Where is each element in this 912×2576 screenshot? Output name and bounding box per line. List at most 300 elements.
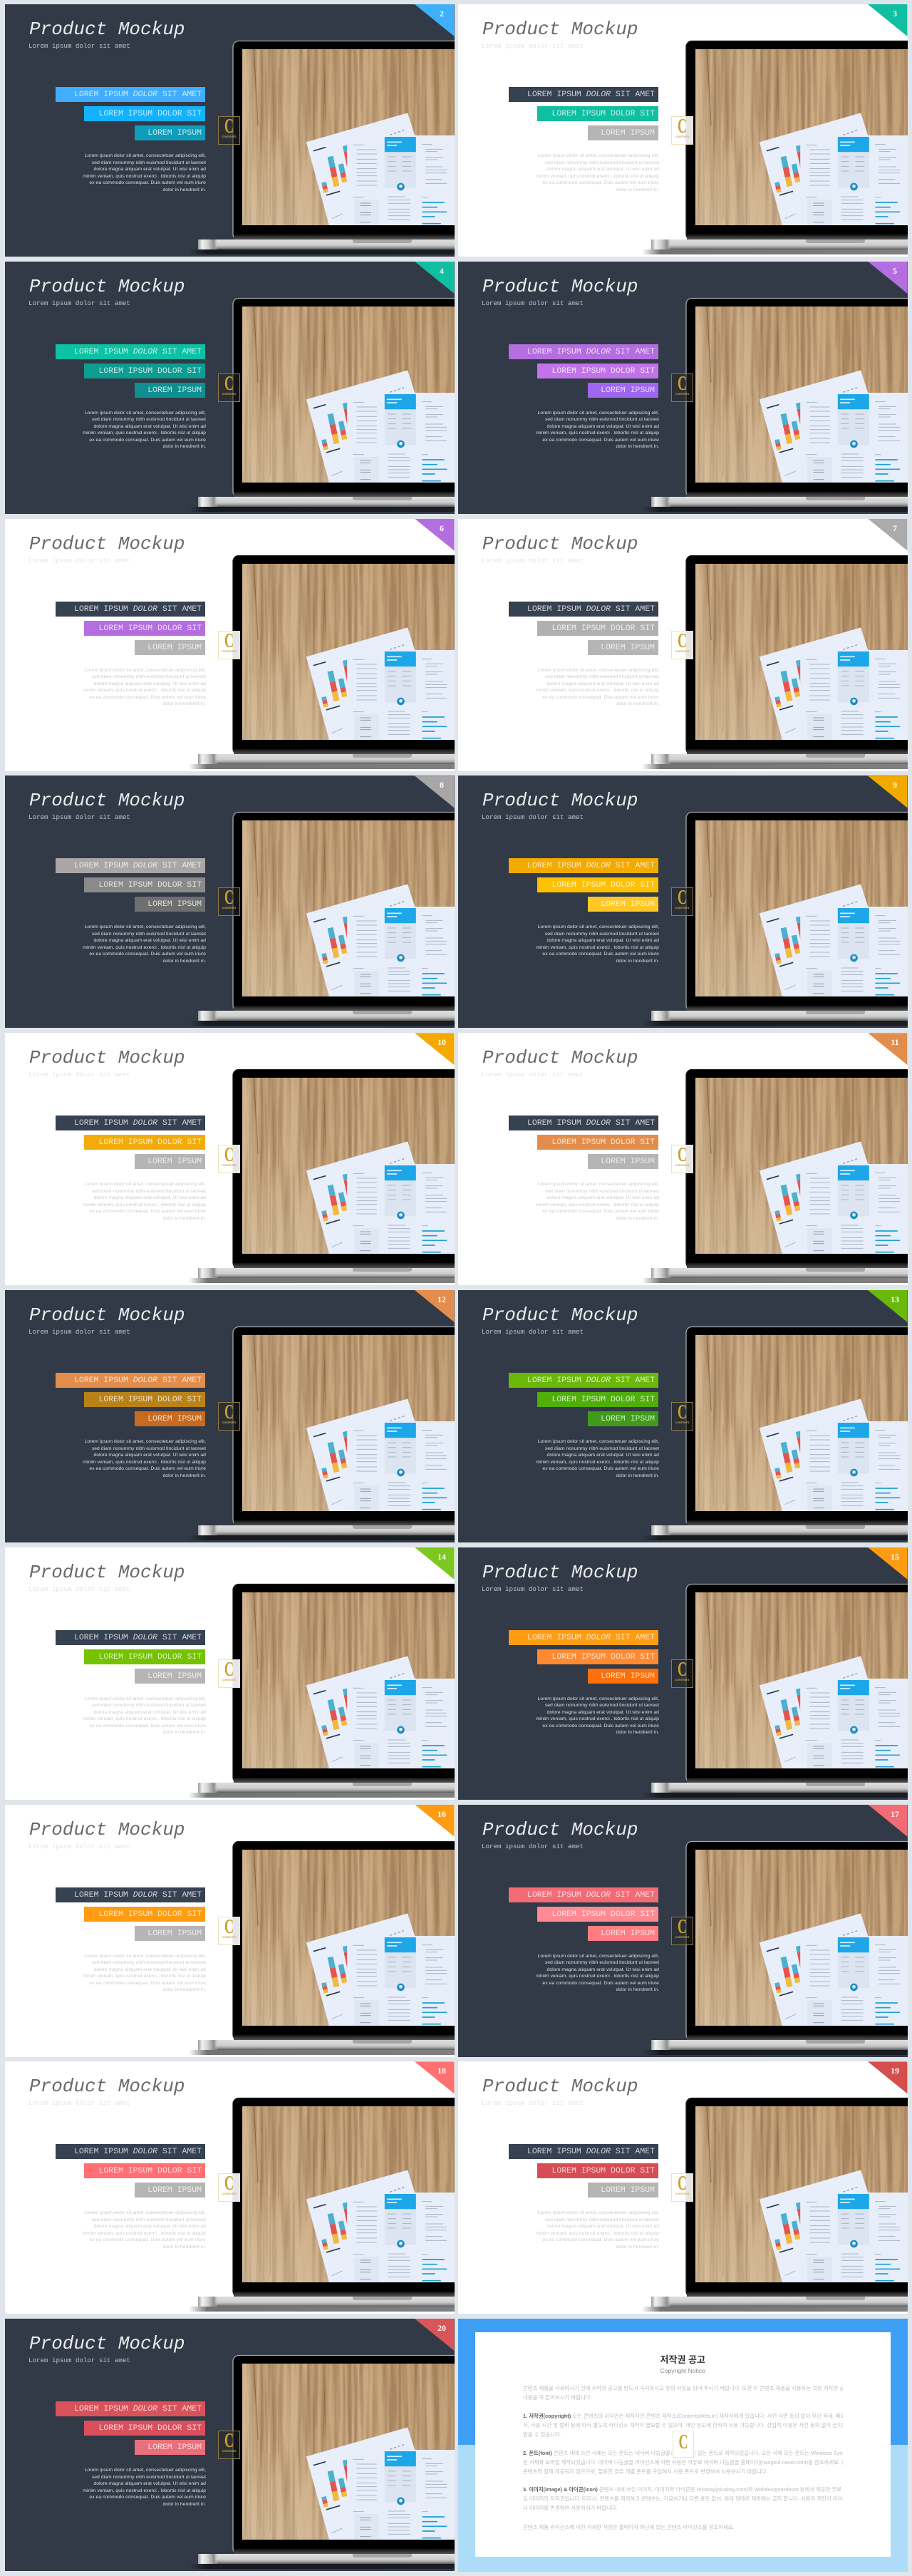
icon: logo badge: CONTENTS [675, 1421, 689, 1424]
title: Product Mockup [482, 533, 638, 555]
icon: logo badge: CONTENTS [675, 1679, 689, 1681]
corner tab [868, 262, 908, 294]
title: Product Mockup [29, 1047, 185, 1068]
body text: dolor in hendrerit in. [162, 444, 206, 449]
notice subtitle: Copyright Notice [660, 2367, 705, 2374]
label bars [56, 602, 205, 655]
icon: logo badge [218, 116, 240, 145]
label bars: LOREM IPSUM DOLOR SIT [98, 1395, 202, 1404]
body text [47, 1696, 206, 1736]
page number: 3 [893, 9, 897, 19]
body text: minim veniam, quis nostrud exerci . lobortis nisl ut aliquip [83, 2231, 206, 2236]
body text: dolore magna aliquam erat volutpat. Ut wisi enim ad [547, 1195, 659, 1200]
panel: slide 5 [457, 262, 908, 514]
label bars: LOREM IPSUM [601, 643, 655, 652]
icon: logo badge: CONTENTS [222, 907, 236, 910]
icon: logo badge [671, 116, 693, 145]
title: Product Mockup [29, 790, 185, 811]
body text: ex ea commodo consequat. Duis autem vel eum iriure [542, 952, 659, 957]
body text: dolore magna aliquam erat volutpat. Ut wisi enim ad [547, 938, 659, 943]
body text: Lorem ipsum dolor sit amet, consectetuer adipiscing elit, [538, 924, 659, 929]
icon: logo badge: CONTENTS [675, 2193, 689, 2195]
body text: Lorem ipsum dolor sit amet, consectetuer adipiscing elit, [538, 668, 659, 673]
page number: 20 [437, 2323, 446, 2333]
title: Product Mockup [482, 1562, 638, 1583]
body text: dolore magna aliquam erat volutpat. Ut wisi enim ad [94, 681, 206, 686]
body text [47, 2210, 206, 2250]
body text: minim veniam, quis nostrud exerci . lobortis nisl ut aliquip [536, 174, 659, 178]
laptop mockup [4, 2319, 455, 2571]
body text [536, 411, 659, 449]
body text: minim veniam, quis nostrud exerci . lobortis nisl ut aliquip [536, 945, 659, 950]
page number: 4 [440, 266, 444, 276]
body text: Lorem ipsum dolor sit amet, consectetuer adipiscing elit, [538, 1182, 659, 1187]
label bars: LOREM IPSUM DOLOR SIT AMET [527, 347, 655, 356]
subtitle: Lorem ipsum dolor sit amet [28, 1328, 130, 1336]
label bars: LOREM IPSUM DOLOR SIT AMET [74, 861, 202, 870]
label bars: LOREM IPSUM DOLOR SIT AMET [527, 604, 655, 614]
body text: dolor in hendrerit in. [616, 701, 659, 706]
body text: minim veniam, quis nostrud exerci . lobortis nisl ut aliquip [536, 688, 659, 693]
body text: ex ea commodo consequat. Duis autem vel eum iriure [89, 1724, 206, 1729]
body text [83, 153, 206, 192]
laptop mockup [457, 2061, 908, 2314]
body text: dolor in hendrerit in. [162, 1216, 206, 1221]
body text: sed diam nonummy nibh euismod tincidunt ut laoreet [92, 1703, 206, 1708]
body text: sed diam nonummy nibh euismod tincidunt ut laoreet [92, 1960, 206, 1965]
subtitle: Lorem ipsum dolor sit amet [28, 813, 130, 821]
label bars: LOREM IPSUM DOLOR SIT [98, 2166, 202, 2175]
label bars: LOREM IPSUM DOLOR SIT AMET [74, 2404, 202, 2413]
body text: minim veniam, quis nostrud exerci . lobortis nisl ut aliquip [536, 2231, 659, 2236]
panel: slide 16 [4, 1805, 455, 2057]
body text: dolore magna aliquam erat volutpat. Ut wisi enim ad [94, 167, 206, 172]
title: Product Mockup [29, 2333, 185, 2354]
body text: ex ea commodo consequat. Duis autem vel eum iriure [89, 2495, 206, 2500]
label bars: LOREM IPSUM DOLOR SIT [551, 624, 655, 633]
body text [536, 668, 659, 706]
body text: Lorem ipsum dolor sit amet, consectetuer adipiscing elit, [85, 924, 206, 929]
label bars [509, 602, 658, 655]
body text: dolor in hendrerit in. [162, 2245, 206, 2250]
body text: sed diam nonummy nibh euismod tincidunt ut laoreet [545, 1446, 659, 1451]
notice card [475, 2332, 891, 2557]
label bars: LOREM IPSUM [147, 386, 202, 395]
page number: 6 [440, 523, 444, 533]
body text: sed diam nonummy nibh euismod tincidunt ut laoreet [92, 674, 206, 679]
body text: sed diam nonummy nibh euismod tincidunt ut laoreet [92, 2475, 206, 2479]
notice clause 2 line 3: 콘텐츠와 함께 제공되지 않으므로, 필요한 경우 개별 폰트를 구입해서 사용 폰트로 변경하여 사용하시기 바랍니다. [523, 2468, 768, 2475]
icon: logo badge: CONTENTS [222, 393, 236, 396]
body text: dolor in hendrerit in. [616, 1216, 659, 1221]
body text: ex ea commodo consequat. Duis autem vel eum iriure [89, 1981, 206, 1986]
body text: dolor in hendrerit in. [616, 1987, 659, 1992]
icon: logo badge [671, 1402, 693, 1431]
body text: Lorem ipsum dolor sit amet, consectetuer adipiscing elit, [85, 411, 206, 416]
label bars: LOREM IPSUM DOLOR SIT [551, 1652, 655, 1661]
panel: slide 19 [457, 2061, 908, 2314]
icon: logo badge: CONTENTS [675, 135, 689, 138]
laptop mockup [192, 40, 455, 254]
label bars: LOREM IPSUM [601, 128, 655, 138]
panel: slide 8 [4, 776, 455, 1028]
body text [47, 1181, 206, 1222]
label bars: LOREM IPSUM [601, 900, 655, 909]
body text: sed diam nonummy nibh euismod tincidunt ut laoreet [92, 417, 206, 422]
title: Product Mockup [29, 2076, 185, 2097]
title: Product Mockup [29, 1819, 185, 1840]
icon: logo badge [218, 887, 240, 916]
body text: sed diam nonummy nibh euismod tincidunt ut laoreet [545, 160, 659, 165]
icon: logo badge: CONTENTS [222, 135, 236, 138]
corner tab [868, 1033, 908, 1065]
body text: ex ea commodo consequat. Duis autem vel eum iriure [89, 1466, 206, 1471]
page number: 16 [437, 1809, 446, 1819]
label bars: LOREM IPSUM DOLOR SIT [551, 366, 655, 376]
laptop mockup [643, 555, 908, 769]
subtitle: Lorem ipsum dolor sit amet [482, 557, 584, 565]
body text: minim veniam, quis nostrud exerci . lobortis nisl ut aliquip [83, 431, 206, 436]
title: Product Mockup [29, 533, 185, 555]
body text: sed diam nonummy nibh euismod tincidunt ut laoreet [92, 2217, 206, 2222]
notice intro line 2: 내용을 꼭 읽어보시기 바랍니다. [523, 2394, 592, 2401]
icon: logo badge [671, 373, 693, 402]
body text: minim veniam, quis nostrud exerci . lobortis nisl ut aliquip [83, 1460, 206, 1464]
label bars: LOREM IPSUM DOLOR SIT AMET [527, 861, 655, 870]
body text: Lorem ipsum dolor sit amet, consectetuer adipiscing elit, [85, 1954, 206, 1959]
label bars: LOREM IPSUM DOLOR SIT [98, 109, 202, 118]
page number: 17 [891, 1809, 899, 1819]
label bars [509, 1373, 658, 1426]
body text: minim veniam, quis nostrud exerci . lobortis nisl ut aliquip [83, 688, 206, 693]
body text: dolore magna aliquam erat volutpat. Ut wisi enim ad [547, 167, 659, 172]
icon: logo badge: C [678, 2431, 688, 2453]
icon: logo badge [671, 1145, 693, 1173]
body text: ex ea commodo consequat. Duis autem vel eum iriure [542, 1466, 659, 1471]
body text: dolore magna aliquam erat volutpat. Ut wisi enim ad [94, 1195, 206, 1200]
title: Product Mockup [29, 19, 185, 40]
body text: minim veniam, quis nostrud exerci . lobortis nisl ut aliquip [83, 945, 206, 950]
body text: dolore magna aliquam erat volutpat. Ut wisi enim ad [547, 1967, 659, 1972]
body text [500, 1438, 659, 1479]
label bars: LOREM IPSUM [147, 1671, 202, 1681]
body text: dolor in hendrerit in. [162, 959, 206, 964]
body text: ex ea commodo consequat. Duis autem vel eum iriure [89, 1209, 206, 1214]
label bars: LOREM IPSUM DOLOR SIT [551, 1395, 655, 1404]
page number: 5 [893, 266, 897, 276]
body text: ex ea commodo consequat. Duis autem vel eum iriure [542, 695, 659, 700]
label bars: LOREM IPSUM DOLOR SIT AMET [74, 1376, 202, 1385]
label bars: LOREM IPSUM DOLOR SIT [98, 366, 202, 376]
title: Product Mockup [482, 2076, 638, 2097]
label bars: LOREM IPSUM [147, 643, 202, 652]
laptop mockup [4, 1290, 455, 1542]
body text: dolore magna aliquam erat volutpat. Ut wisi enim ad [547, 2224, 659, 2229]
panel: slide 11 [457, 1033, 908, 1285]
panel: slide 6 [4, 519, 455, 771]
icon: logo badge: CONTENTS [675, 393, 689, 396]
body text: dolore magna aliquam erat volutpat. Ut wisi enim ad [547, 681, 659, 686]
icon: logo badge: CONTENTS [675, 1936, 689, 1939]
icon: logo badge: CONTENTS [222, 2193, 236, 2195]
laptop mockup [190, 555, 455, 769]
corner tab [415, 776, 455, 808]
label bars: LOREM IPSUM [601, 1671, 655, 1681]
body text [47, 1953, 206, 1994]
body text: dolore magna aliquam erat volutpat. Ut wisi enim ad [94, 2224, 206, 2229]
body text: minim veniam, quis nostrud exerci . lobortis nisl ut aliquip [83, 174, 206, 178]
body text: dolore magna aliquam erat volutpat. Ut wisi enim ad [547, 1453, 659, 1458]
body text: dolor in hendrerit in. [162, 187, 206, 192]
page number: 9 [893, 780, 897, 790]
body text: ex ea commodo consequat. Duis autem vel eum iriure [89, 695, 206, 700]
laptop mockup [457, 1547, 908, 1800]
panel: slide 20 [4, 2319, 455, 2571]
label bars: LOREM IPSUM [147, 1157, 202, 1166]
body text: Lorem ipsum dolor sit amet, consectetuer adipiscing elit, [85, 1182, 206, 1187]
label bars: LOREM IPSUM DOLOR SIT [98, 624, 202, 633]
body text: Lorem ipsum dolor sit amet, consectetuer adipiscing elit, [85, 2468, 206, 2473]
body text: Lorem ipsum dolor sit amet, consectetuer adipiscing elit, [538, 2210, 659, 2215]
icon: logo badge [671, 2173, 693, 2202]
body text: dolore magna aliquam erat volutpat. Ut wisi enim ad [94, 1967, 206, 1972]
laptop mockup [4, 1547, 455, 1800]
body text: dolore magna aliquam erat volutpat. Ut wisi enim ad [547, 424, 659, 429]
body text: sed diam nonummy nibh euismod tincidunt ut laoreet [545, 674, 659, 679]
subtitle: Lorem ipsum dolor sit amet [482, 1328, 584, 1336]
laptop mockup [646, 298, 908, 512]
panel: slide 4 [4, 262, 455, 514]
corner tab [415, 1290, 455, 1322]
body text: dolor in hendrerit in. [616, 444, 659, 449]
icon: logo badge [218, 373, 240, 402]
laptop mockup [643, 40, 908, 254]
body text: Lorem ipsum dolor sit amet, consectetuer adipiscing elit, [538, 411, 659, 416]
laptop mockup [192, 298, 455, 512]
label bars [509, 858, 658, 912]
body text: sed diam nonummy nibh euismod tincidunt ut laoreet [92, 932, 206, 937]
label bars: LOREM IPSUM DOLOR SIT AMET [74, 604, 202, 614]
laptop mockup [4, 1805, 455, 2057]
body text: minim veniam, quis nostrud exerci . lobortis nisl ut aliquip [83, 1202, 206, 1207]
icon: logo badge [671, 1917, 693, 1945]
label bars [56, 858, 205, 912]
label bars: LOREM IPSUM DOLOR SIT AMET [527, 1633, 655, 1642]
corner tab [868, 1547, 908, 1580]
icon: logo badge [673, 2431, 694, 2458]
body text: ex ea commodo consequat. Duis autem vel eum iriure [89, 180, 206, 185]
label bars: LOREM IPSUM [147, 128, 202, 138]
body text: dolore magna aliquam erat volutpat. Ut wisi enim ad [94, 424, 206, 429]
label bars [56, 2144, 205, 2198]
label bars [56, 1116, 205, 1169]
title: Product Mockup [29, 1562, 185, 1583]
label bars [56, 2401, 205, 2455]
label bars: LOREM IPSUM [147, 900, 202, 909]
body text: sed diam nonummy nibh euismod tincidunt ut laoreet [92, 1446, 206, 1451]
panel: slide 18 [4, 2061, 455, 2314]
title: Product Mockup [29, 1304, 185, 1326]
body text: sed diam nonummy nibh euismod tincidunt ut laoreet [545, 932, 659, 937]
body text: minim veniam, quis nostrud exerci . lobortis nisl ut aliquip [83, 2488, 206, 2493]
subtitle: Lorem ipsum dolor sit amet [482, 1843, 584, 1850]
body text: sed diam nonummy nibh euismod tincidunt ut laoreet [545, 1960, 659, 1965]
title: Product Mockup [482, 1304, 638, 1326]
body text: sed diam nonummy nibh euismod tincidunt ut laoreet [545, 1189, 659, 1194]
body text: dolore magna aliquam erat volutpat. Ut wisi enim ad [94, 938, 206, 943]
icon: logo badge: CONTENTS [222, 1164, 236, 1167]
icon: logo badge: CONTENTS [222, 1421, 236, 1424]
body text: Lorem ipsum dolor sit amet, consectetuer adipiscing elit, [538, 1954, 659, 1959]
page number: 13 [891, 1294, 899, 1304]
panel: slide 15 [457, 1547, 908, 1800]
page number: 12 [437, 1294, 446, 1304]
body text: ex ea commodo consequat. Duis autem vel eum iriure [89, 2237, 206, 2242]
icon: logo badge [671, 631, 693, 659]
subtitle: Lorem ipsum dolor sit amet [28, 1585, 130, 1593]
label bars [509, 2144, 658, 2198]
icon: logo badge: CONTENTS [222, 650, 236, 653]
panel: slide 17 [457, 1805, 908, 2057]
body text: dolore magna aliquam erat volutpat. Ut wisi enim ad [94, 1710, 206, 1715]
label bars: LOREM IPSUM DOLOR SIT [551, 2166, 655, 2175]
panel: copyright notice [458, 2319, 908, 2572]
laptop mockup [457, 776, 908, 1028]
corner tab [415, 4, 455, 36]
icon: logo badge: CONTENTS [675, 650, 689, 653]
title: Product Mockup [29, 276, 185, 297]
body text: Lorem ipsum dolor sit amet, consectetuer adipiscing elit, [85, 1696, 206, 1701]
corner tab [868, 4, 908, 36]
page number: 15 [891, 1552, 899, 1562]
body text [536, 153, 659, 192]
label bars: LOREM IPSUM DOLOR SIT [98, 880, 202, 890]
subtitle: Lorem ipsum dolor sit amet [28, 1843, 130, 1850]
body text [47, 2467, 206, 2508]
label bars: LOREM IPSUM DOLOR SIT [98, 2423, 202, 2433]
corner tab [415, 1547, 455, 1580]
body text: Lorem ipsum dolor sit amet, consectetuer adipiscing elit, [85, 153, 206, 158]
panel: slide 13 [457, 1290, 908, 1542]
body text [83, 411, 206, 449]
body text: dolor in hendrerit in. [162, 701, 206, 706]
notice title: 저작권 공고 [660, 2354, 705, 2365]
subtitle: Lorem ipsum dolor sit amet [28, 1071, 130, 1078]
body text [83, 668, 206, 706]
label bars [509, 87, 658, 140]
body text: sed diam nonummy nibh euismod tincidunt ut laoreet [545, 2217, 659, 2222]
corner tab [415, 1033, 455, 1065]
label bars: LOREM IPSUM [147, 1414, 202, 1423]
label bars: LOREM IPSUM [601, 386, 655, 395]
label bars: LOREM IPSUM DOLOR SIT AMET [74, 2147, 202, 2156]
laptop mockup [4, 2061, 455, 2314]
body text: Lorem ipsum dolor sit amet, consectetuer adipiscing elit, [85, 1439, 206, 1444]
body text: sed diam nonummy nibh euismod tincidunt ut laoreet [545, 417, 659, 422]
subtitle: Lorem ipsum dolor sit amet [482, 42, 584, 50]
label bars [509, 344, 658, 398]
icon: logo badge: CONTENTS [222, 2450, 236, 2453]
body text: dolore magna aliquam erat volutpat. Ut wisi enim ad [547, 1710, 659, 1715]
corner tab [415, 1805, 455, 1837]
body text: Lorem ipsum dolor sit amet, consectetuer adipiscing elit, [538, 153, 659, 158]
label bars [509, 1116, 658, 1169]
body text: ex ea commodo consequat. Duis autem vel eum iriure [89, 438, 206, 443]
icon: logo badge: CONTENTS [222, 1936, 236, 1939]
title: Product Mockup [482, 790, 638, 811]
label bars: LOREM IPSUM DOLOR SIT AMET [527, 90, 655, 99]
icon: logo badge [671, 1659, 693, 1688]
label bars: LOREM IPSUM DOLOR SIT AMET [74, 1118, 202, 1128]
page number: 14 [437, 1552, 446, 1562]
icon: logo badge [218, 1917, 240, 1945]
body text: sed diam nonummy nibh euismod tincidunt ut laoreet [92, 1189, 206, 1194]
label bars [56, 1373, 205, 1426]
title: Product Mockup [482, 1047, 638, 1068]
body text: minim veniam, quis nostrud exerci . lobortis nisl ut aliquip [83, 1716, 206, 1721]
label bars: LOREM IPSUM DOLOR SIT [98, 1138, 202, 1147]
corner tab [415, 2319, 455, 2351]
label bars: LOREM IPSUM DOLOR SIT [98, 1910, 202, 1919]
icon: logo badge: CONTENTS [222, 1679, 236, 1681]
laptop mockup [457, 1290, 908, 1542]
page number: 19 [891, 2066, 899, 2076]
label bars [56, 344, 205, 398]
body text: ex ea commodo consequat. Duis autem vel eum iriure [542, 180, 659, 185]
subtitle: Lorem ipsum dolor sit amet [482, 1071, 584, 1078]
subtitle: Lorem ipsum dolor sit amet [482, 1585, 584, 1593]
label bars: LOREM IPSUM DOLOR SIT AMET [527, 1118, 655, 1128]
label bars [509, 1630, 658, 1684]
page number: 2 [440, 9, 444, 19]
body text: ex ea commodo consequat. Duis autem vel eum iriure [89, 952, 206, 957]
notice closing: 콘텐츠 제품 라이선스에 대한 자세한 사항은 홈페이지 하단에 있는 콘텐츠 라이선스를 참조하세요. [523, 2524, 735, 2530]
laptop mockup [457, 1805, 908, 2057]
label bars: LOREM IPSUM [601, 1414, 655, 1423]
icon: logo badge [218, 631, 240, 659]
panel: slide 10 [4, 1033, 455, 1285]
body text: minim veniam, quis nostrud exerci . lobortis nisl ut aliquip [536, 1460, 659, 1464]
label bars: LOREM IPSUM DOLOR SIT AMET [74, 1890, 202, 1900]
laptop mockup [4, 1033, 455, 1285]
label bars: LOREM IPSUM DOLOR SIT [98, 1652, 202, 1661]
page number: 18 [437, 2066, 446, 2076]
panel: slide 3 [457, 4, 908, 257]
icon: logo badge [218, 2431, 240, 2459]
subtitle: Lorem ipsum dolor sit amet [482, 813, 584, 821]
title: Product Mockup [482, 19, 638, 40]
body text: Lorem ipsum dolor sit amet, consectetuer adipiscing elit, [538, 1439, 659, 1444]
label bars [56, 87, 205, 140]
body text: sed diam nonummy nibh euismod tincidunt ut laoreet [92, 160, 206, 165]
title: Product Mockup [482, 1819, 638, 1840]
icon: logo badge [218, 1402, 240, 1431]
icon: logo badge [218, 1145, 240, 1173]
panel: slide 9 [457, 776, 908, 1028]
body text: ex ea commodo consequat. Duis autem vel eum iriure [542, 1981, 659, 1986]
body text: dolore magna aliquam erat volutpat. Ut wisi enim ad [94, 2481, 206, 2486]
label bars [56, 1630, 205, 1684]
notice clause 1 line 3: 받을 수 있습니다. [523, 2431, 561, 2438]
label bars: LOREM IPSUM [601, 1157, 655, 1166]
page number: 10 [437, 1037, 446, 1047]
corner tab [868, 1290, 908, 1322]
body text: Lorem ipsum dolor sit amet, consectetuer adipiscing elit, [85, 668, 206, 673]
label bars [509, 1887, 658, 1941]
body text: dolor in hendrerit in. [162, 1987, 206, 1992]
subtitle: Lorem ipsum dolor sit amet [28, 299, 130, 307]
body text [47, 1438, 206, 1479]
